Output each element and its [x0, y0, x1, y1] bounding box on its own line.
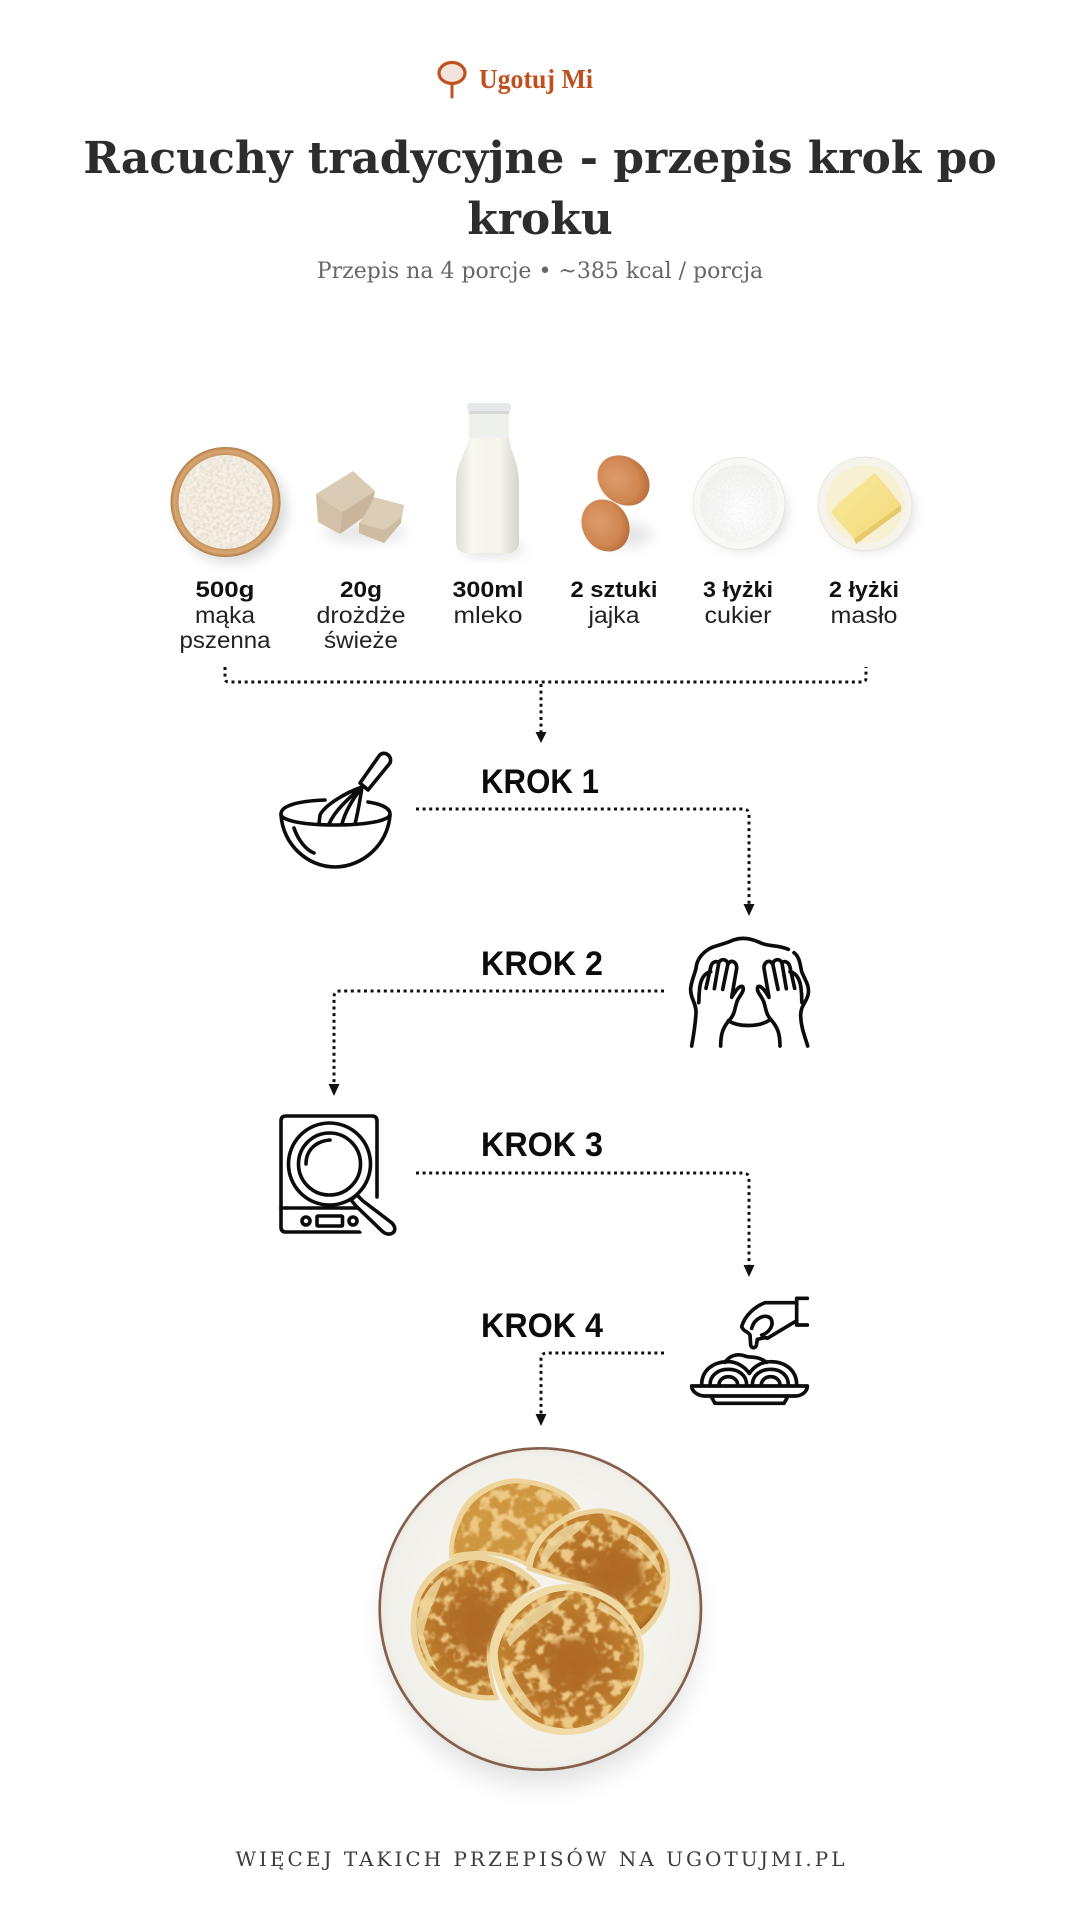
icon: bowl and whisk: [281, 753, 391, 867]
label: sugar: cukier: [704, 602, 772, 628]
arrow: step 2 to step 3: [328, 991, 664, 1096]
ingredient: butter plate: [818, 457, 913, 551]
icon: induction stove and pan: [281, 1116, 395, 1252]
ingredient: flour bowl: [170, 447, 286, 562]
ingredient: milk bottle: [456, 403, 525, 556]
step 3 label: KROK 3: [481, 1126, 603, 1164]
subtitle: Przepis na 4 porcje • ~385 kcal / porcja: [317, 259, 763, 284]
step 4 label: KROK 4: [481, 1307, 603, 1345]
label: butter: masło: [830, 602, 898, 628]
step 2 label: KROK 2: [481, 945, 603, 983]
label: butter: 2 łyżki: [829, 577, 899, 602]
label: butter: [829, 577, 899, 628]
arrow: ingredients to step 1: [225, 667, 866, 743]
ingredient: eggs: [572, 445, 660, 560]
step 1 label: KROK 1: [481, 763, 599, 801]
label: eggs: 2 sztuki: [570, 577, 658, 602]
label: yeast: 20g: [340, 577, 382, 602]
plate: [380, 1448, 701, 1770]
label: flour: [180, 577, 271, 653]
ingredient: sugar bowl: [693, 458, 786, 550]
icon: logo spoon: [439, 62, 465, 97]
title: kroku: [467, 194, 613, 245]
icon: hand over pasta plate: [692, 1298, 807, 1403]
icon: kneading hands: [691, 938, 808, 1046]
label: yeast: świeże: [324, 627, 398, 653]
final dish: plate of pancakes: [380, 1448, 701, 1783]
label: flour: mąka: [195, 602, 255, 628]
brand name: Ugotuj Mi: [479, 64, 593, 94]
ingredient: yeast: [316, 471, 407, 543]
pancake: left: [411, 1554, 542, 1701]
label: eggs: [570, 577, 658, 628]
panel: ingredients: [170, 403, 913, 653]
label: flour: 500g: [196, 577, 254, 602]
label: milk: 300ml: [452, 577, 524, 602]
pancake: back: [449, 1478, 581, 1567]
footer: WIĘCEJ TAKICH PRZEPISÓW NA UGOTUJMI.PL: [236, 1846, 844, 1871]
arrow: step 4 to final dish: [536, 1353, 664, 1426]
logo: [439, 62, 593, 97]
title: Racuchy tradycyjne - przepis krok po: [83, 133, 997, 184]
label: sugar: 3 łyżki: [703, 577, 773, 602]
arrow: step 3 to step 4: [416, 1173, 754, 1277]
label: milk: mleko: [454, 602, 522, 628]
label: sugar: [703, 577, 773, 628]
ingredient labels: [180, 577, 899, 653]
title: [83, 133, 997, 245]
label: flour: pszenna: [180, 627, 271, 653]
pancake: front: [490, 1584, 644, 1735]
label: milk: [452, 577, 524, 628]
arrow: step 1 to step 2: [416, 809, 754, 916]
plate shadow: [386, 1473, 696, 1783]
label: yeast: [316, 577, 406, 653]
pancake: right: [527, 1508, 670, 1636]
label: eggs: jajka: [587, 602, 640, 628]
label: yeast: drożdże: [316, 602, 406, 628]
